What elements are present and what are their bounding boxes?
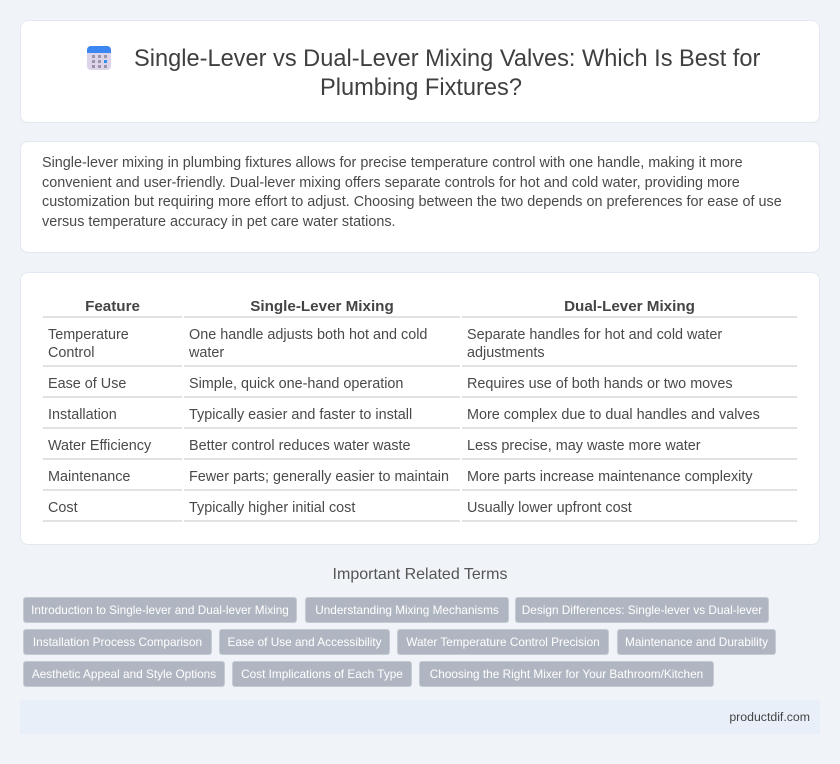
title: Plumbing Fixtures? bbox=[320, 75, 522, 101]
comparison table: Ease of Use bbox=[48, 376, 126, 392]
comparison table: Less precise, may waste more water bbox=[467, 438, 701, 454]
related terms tags bbox=[23, 597, 776, 687]
comparison table: Feature bbox=[85, 298, 140, 315]
comparison table: Requires use of both hands or two moves bbox=[467, 376, 733, 392]
related terms tags: Installation Process Comparison bbox=[33, 635, 202, 649]
related terms tags: Water Temperature Control Precision bbox=[406, 635, 600, 649]
icon: calendar bbox=[87, 46, 111, 70]
comparison table: Dual-Lever Mixing bbox=[564, 298, 695, 315]
related terms tags: Ease of Use and Accessibility bbox=[227, 635, 382, 649]
comparison table: Water Efficiency bbox=[48, 438, 151, 454]
comparison table: More complex due to dual handles and valves bbox=[467, 407, 760, 423]
related terms tags: Design Differences: Single-lever vs Dual-lever bbox=[522, 603, 762, 617]
related terms tags: Cost Implications of Each Type bbox=[241, 667, 403, 681]
comparison table: Temperature bbox=[48, 327, 129, 343]
intro paragraph: versus temperature accuracy in pet care water stations. bbox=[42, 214, 396, 230]
comparison table: Typically easier and faster to install bbox=[189, 407, 412, 423]
comparison table: Usually lower upfront cost bbox=[467, 500, 632, 516]
comparison table: Maintenance bbox=[48, 469, 130, 485]
title bbox=[134, 46, 760, 101]
intro card bbox=[20, 141, 820, 253]
comparison table: More parts increase maintenance complexity bbox=[467, 469, 753, 485]
comparison table: water bbox=[189, 345, 224, 361]
comparison table bbox=[43, 298, 797, 522]
intro paragraph: Single-lever mixing in plumbing fixtures allows for precise temperature control with one handle, making it more bbox=[42, 155, 743, 171]
comparison table: Cost bbox=[48, 500, 78, 516]
comparison table: Control bbox=[48, 345, 94, 361]
comparison table: Typically higher initial cost bbox=[189, 500, 355, 516]
related terms tags: Understanding Mixing Mechanisms bbox=[315, 603, 499, 617]
footer source text: productdif.com bbox=[729, 710, 810, 724]
related terms tags: Introduction to Single-lever and Dual-lever Mixing bbox=[31, 603, 289, 617]
comparison table: Installation bbox=[48, 407, 117, 423]
related terms heading: Important Related Terms bbox=[333, 566, 507, 583]
comparison table: adjustments bbox=[467, 345, 545, 361]
comparison table: Separate handles for hot and cold water bbox=[467, 327, 722, 343]
comparison table: Single-Lever Mixing bbox=[250, 298, 394, 315]
footer bar bbox=[20, 700, 820, 734]
related terms tags: Aesthetic Appeal and Style Options bbox=[32, 667, 216, 681]
comparison table: Better control reduces water waste bbox=[189, 438, 411, 454]
intro paragraph: customization but requiring more effort to adjust. Choosing between the two depends on preferences for ease of use bbox=[42, 194, 782, 210]
table card bbox=[20, 272, 820, 545]
header card bbox=[20, 20, 820, 123]
comparison table: One handle adjusts both hot and cold bbox=[189, 327, 427, 343]
comparison table: Fewer parts; generally easier to maintain bbox=[189, 469, 449, 485]
title: Single-Lever vs Dual-Lever Mixing Valves: Which Is Best for bbox=[134, 46, 760, 72]
comparison table: Simple, quick one-hand operation bbox=[189, 376, 403, 392]
related terms tags: Choosing the Right Mixer for Your Bathroom/Kitchen bbox=[430, 667, 703, 681]
related terms tags: Maintenance and Durability bbox=[625, 635, 768, 649]
intro paragraph bbox=[42, 155, 782, 230]
intro paragraph: convenient and user-friendly. Dual-lever mixing offers separate controls for hot and cold water, providing more bbox=[42, 174, 740, 190]
